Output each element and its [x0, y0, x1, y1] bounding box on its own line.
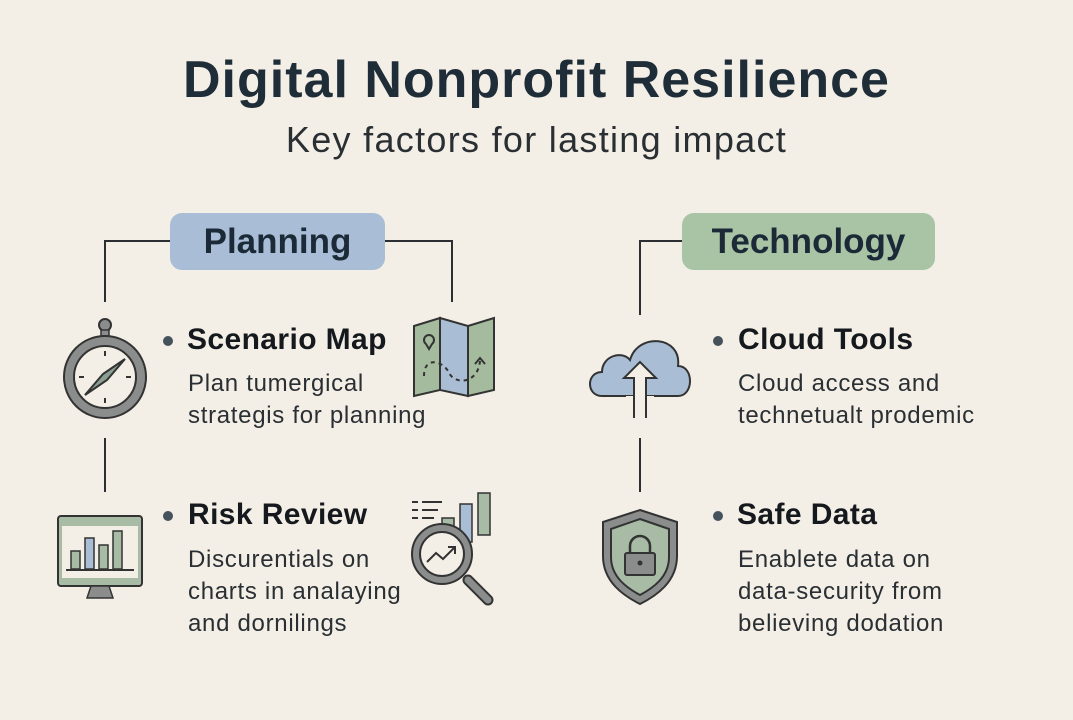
- item: scenario map: [163, 323, 426, 429]
- panel: technology: Enablete data on: [738, 546, 931, 573]
- panel: planning: Scenario Map: [187, 323, 387, 356]
- icon: monitor chart: [57, 515, 143, 599]
- panel: planning: Discurentials on: [188, 546, 370, 573]
- panel: planning: Risk Review: [188, 498, 368, 531]
- item: cloud tools: [713, 323, 975, 429]
- panel: technology: Safe Data: [737, 498, 877, 531]
- icon: cloud upload: [589, 340, 691, 418]
- heading: planning: [170, 213, 385, 270]
- panel: planning: Plan tumergical: [188, 370, 364, 397]
- icon: map: [413, 316, 495, 398]
- panel: planning: charts in analaying: [188, 578, 401, 605]
- icon: shield lock: [602, 509, 678, 606]
- item: safe data: [713, 498, 944, 637]
- panel: technology: Cloud access and: [738, 370, 940, 397]
- panel: technology: [589, 213, 975, 637]
- heading: technology: Technology: [712, 222, 905, 261]
- subtitle: Key factors for lasting impact: [286, 119, 787, 160]
- title: Digital Nonprofit Resilience: [183, 51, 890, 109]
- icon: magnifier with bars: [411, 492, 494, 606]
- icon: compass: [63, 318, 147, 419]
- panel: technology: believing dodation: [738, 610, 944, 637]
- panel: technology: Cloud Tools: [738, 323, 913, 356]
- panel: planning: and dornilings: [188, 610, 347, 637]
- panel: planning: strategis for planning: [188, 402, 426, 429]
- item: risk review: [163, 498, 401, 637]
- panel: technology: technetualt prodemic: [738, 402, 975, 429]
- panel: planning: [57, 213, 495, 637]
- panel: technology: data-security from: [738, 578, 943, 605]
- heading: technology: [682, 213, 935, 270]
- heading: planning: Planning: [204, 222, 351, 261]
